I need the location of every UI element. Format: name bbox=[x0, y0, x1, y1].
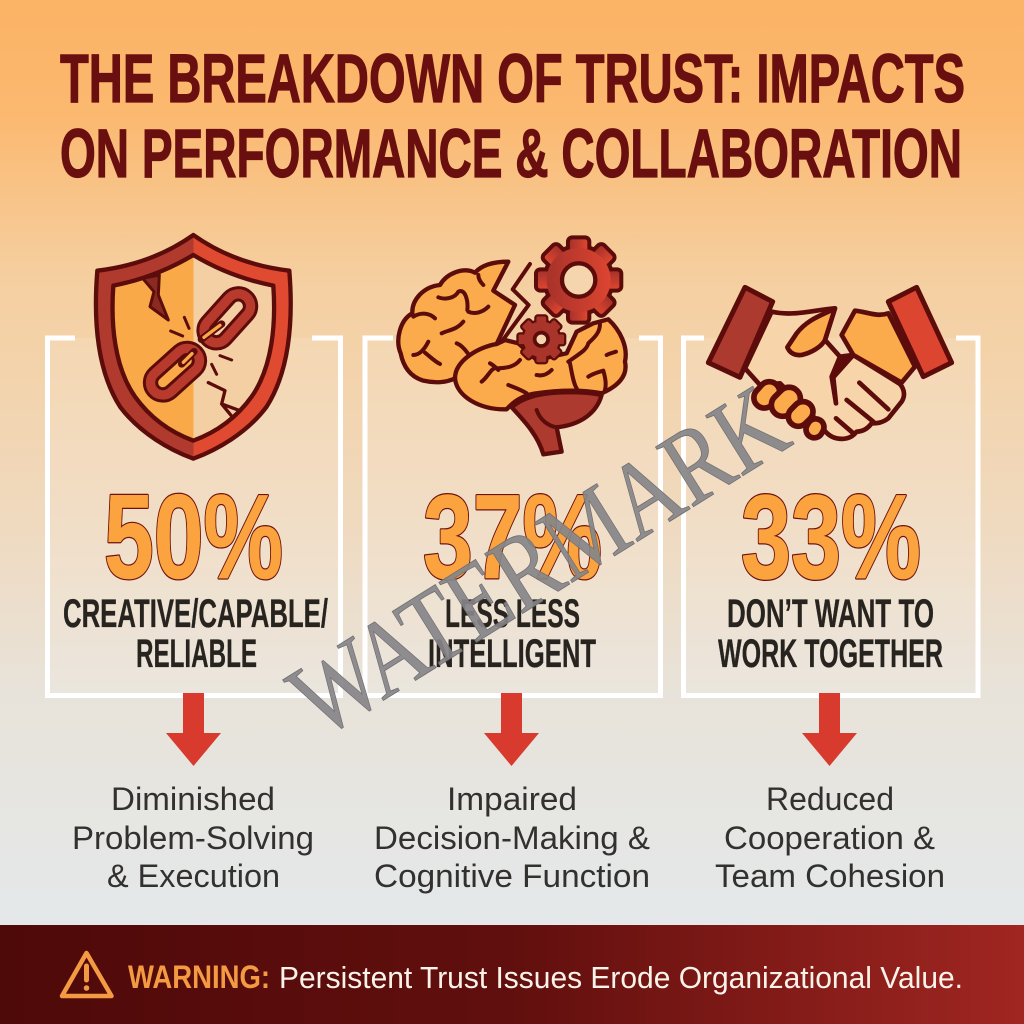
stat: 50%: 50% bbox=[104, 470, 283, 604]
panel: work together frame bbox=[684, 338, 978, 696]
label: creative/capable/reliable: CREATIVE/CAPABLE/ bbox=[63, 592, 328, 636]
icon: brain with gears bbox=[398, 239, 626, 454]
stat: 50%: 50% bbox=[104, 470, 283, 604]
brain stem bbox=[512, 392, 602, 454]
left cuff bbox=[708, 287, 773, 377]
orange sleeve hand bbox=[842, 311, 915, 383]
label: creative/capable/reliable: RELIABLE bbox=[136, 632, 257, 676]
text: reduced cooperation: Reduced bbox=[766, 781, 894, 817]
label: less less intelligent bbox=[428, 592, 596, 676]
lightning crack bbox=[502, 264, 530, 342]
chain upper link bbox=[199, 289, 256, 348]
text: diminished problem-solving bbox=[72, 781, 314, 894]
stat: 33%: 33% bbox=[741, 470, 921, 604]
panel: creative/capable/reliable frame bbox=[48, 338, 340, 696]
text: diminished problem-solving: Problem-Solving bbox=[72, 820, 314, 856]
text: impaired decision-making bbox=[374, 781, 650, 894]
broken inner chain pieces bbox=[201, 324, 222, 339]
watermark: WATERMARK bbox=[270, 363, 808, 760]
chain lower link bbox=[145, 343, 205, 400]
label: less less intelligent: LESS LESS bbox=[445, 592, 580, 636]
icon: handshake bbox=[708, 287, 952, 441]
text: reduced cooperation: Team Cohesion bbox=[715, 858, 945, 894]
arrow: first column bbox=[166, 693, 221, 766]
label: less less intelligent: INTELLIGENT bbox=[428, 632, 596, 676]
title bbox=[60, 40, 965, 192]
right cuff bbox=[888, 287, 952, 377]
crack top bbox=[143, 275, 168, 320]
large gear bbox=[538, 239, 619, 321]
small gear bbox=[519, 317, 564, 362]
label: creative/capable/reliable bbox=[63, 592, 328, 676]
warning text: WARNING: bbox=[128, 959, 270, 995]
stat: 37%: 37% bbox=[423, 470, 602, 604]
arrow: third column bbox=[802, 693, 857, 766]
spark lines bbox=[171, 317, 232, 374]
finger lines bbox=[836, 383, 888, 433]
brain folds bbox=[413, 275, 616, 393]
text: diminished problem-solving: & Execution bbox=[107, 858, 280, 894]
text: impaired decision-making: Impaired bbox=[447, 781, 577, 817]
text: reduced cooperation bbox=[715, 781, 945, 894]
text: impaired decision-making: Cognitive Function bbox=[374, 858, 650, 894]
stat: 33%: 33% bbox=[741, 470, 921, 604]
brain body bbox=[398, 262, 626, 409]
text: diminished problem-solving: Diminished bbox=[111, 781, 275, 817]
label: don't want to work together bbox=[718, 592, 943, 676]
fingers bbox=[750, 377, 784, 412]
crack bottom bbox=[208, 383, 240, 417]
panel: less intelligent frame bbox=[365, 338, 660, 696]
orange thumb bbox=[787, 308, 835, 355]
lower lobe fold bbox=[455, 344, 497, 378]
stat: 37%: 37% bbox=[423, 470, 602, 604]
warning band bbox=[0, 925, 1024, 1024]
icon: warning triangle bbox=[62, 953, 112, 996]
text: reduced cooperation: Cooperation & bbox=[724, 820, 935, 856]
arrow: second column bbox=[484, 693, 539, 766]
light hand bbox=[745, 308, 904, 439]
text: impaired decision-making: Decision-Making & bbox=[374, 820, 650, 856]
icon: cracked shield with broken chain bbox=[96, 235, 291, 459]
warning text: Persistent Trust Issues Erode Organizational Value. bbox=[279, 960, 963, 995]
